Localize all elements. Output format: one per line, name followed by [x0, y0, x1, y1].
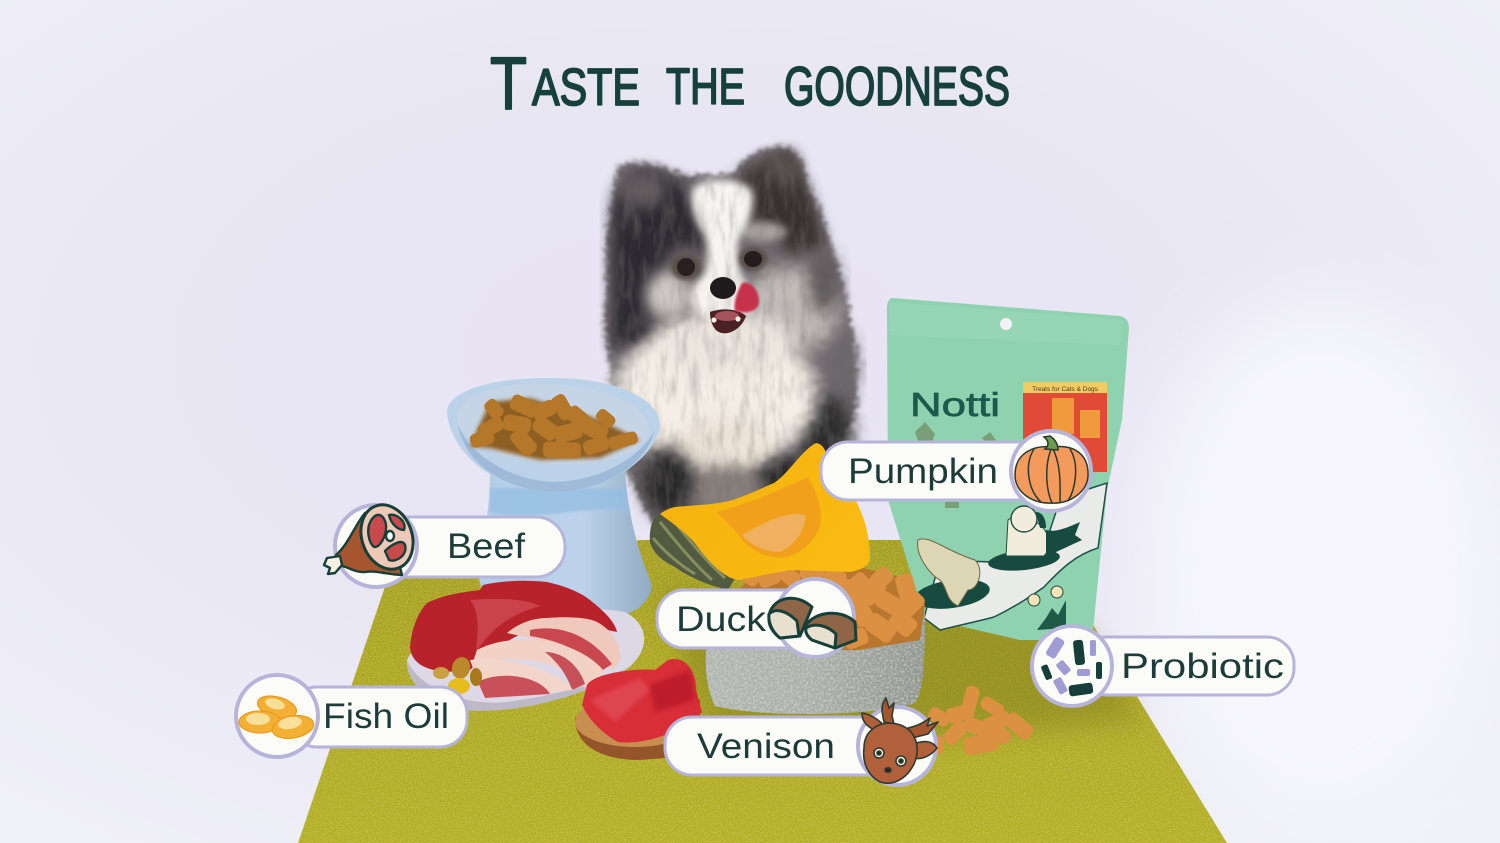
pork slices — [507, 617, 620, 670]
right dark head patch — [738, 150, 825, 255]
pumpkin wedge — [650, 443, 870, 590]
icon circle — [858, 707, 936, 785]
icon: bacteria — [1041, 636, 1102, 697]
label text: Fish Oil — [323, 697, 449, 736]
label text: Probiotic — [1121, 647, 1284, 686]
bowl body — [706, 612, 925, 714]
pill — [821, 442, 1051, 500]
lower chest brown-gray — [683, 466, 767, 510]
muzzle — [690, 274, 750, 322]
white blaze — [692, 180, 753, 290]
pill — [290, 687, 467, 747]
bowl outer — [447, 378, 660, 492]
icon circle — [1032, 626, 1112, 706]
lower left dark fur — [644, 448, 692, 516]
label: Fish Oil — [236, 675, 467, 757]
scattered kibble on table — [926, 685, 1036, 756]
bag illustration: grass — [1037, 600, 1066, 630]
right ear highlight — [766, 154, 798, 182]
white chest — [613, 323, 817, 467]
lower right dark fur — [800, 393, 852, 477]
title — [490, 42, 1010, 125]
kibble in blue bowl — [469, 392, 640, 460]
beef cut — [410, 581, 617, 672]
label: Pumpkin — [821, 431, 1091, 511]
bag small prints — [915, 422, 996, 508]
wood board — [575, 700, 700, 760]
dog — [604, 146, 858, 525]
title: ASTE — [532, 59, 640, 117]
venison on wooden board — [575, 659, 702, 760]
teeth — [711, 316, 741, 323]
bowl inner — [454, 377, 652, 471]
bag illustration: cat on skateboard — [987, 506, 1082, 574]
left cheek fur — [646, 273, 690, 317]
blue bowl stand — [447, 377, 660, 616]
nose — [710, 277, 736, 299]
label: Beef — [324, 497, 565, 587]
product window — [1023, 382, 1107, 472]
pill — [657, 590, 817, 648]
dog fur tones — [612, 150, 857, 516]
icon: deer head — [862, 698, 938, 783]
label: Venison — [665, 698, 938, 785]
pumpkin skin — [650, 507, 740, 590]
pill — [1080, 637, 1294, 695]
plate — [407, 609, 644, 709]
icon circle — [335, 505, 417, 587]
right cheek fur — [740, 268, 840, 352]
left ear — [618, 172, 666, 208]
icon: pumpkin — [1015, 436, 1088, 503]
icon circle — [776, 579, 854, 657]
icon circle — [236, 675, 318, 757]
small capsules on plate — [433, 655, 482, 694]
icon: ham leg — [324, 497, 422, 577]
title: THE — [666, 58, 745, 115]
table with yellow-green cloth — [298, 540, 1227, 843]
label text: Pumpkin — [848, 452, 998, 491]
label: Probiotic — [1032, 626, 1294, 706]
brand name: Notti — [910, 386, 1000, 423]
tongue — [734, 283, 759, 312]
bag illustration: dog on skateboard — [912, 539, 992, 613]
stand base — [478, 470, 652, 616]
icon circle — [1011, 431, 1091, 511]
plate of raw meat — [407, 581, 644, 711]
label text: Venison — [697, 727, 835, 766]
pumpkin seed cavity — [716, 477, 821, 558]
pill — [370, 517, 565, 577]
title: GOODNESS — [784, 55, 1010, 117]
brow streak — [743, 223, 787, 241]
pumpkin flesh — [660, 443, 870, 580]
dog fur silhouette — [604, 146, 858, 525]
red meat chunks — [582, 659, 702, 743]
kibble pile — [735, 562, 927, 651]
pill — [665, 717, 897, 775]
icon: capsules — [239, 692, 316, 741]
icon: duck slices — [769, 598, 856, 648]
label text: Duck — [676, 600, 767, 639]
gray bowl with kibble — [706, 562, 927, 714]
mouth — [710, 309, 746, 333]
bag illustration: flowers — [1028, 586, 1063, 606]
eyes — [671, 247, 767, 280]
product window: Treats for Cats & Dogs — [1032, 386, 1099, 393]
title: T — [490, 42, 527, 125]
bag body — [887, 298, 1129, 640]
pet food bag — [887, 298, 1129, 640]
label text: Beef — [447, 527, 525, 566]
hang hole — [1000, 318, 1012, 330]
bag illustration: road — [924, 483, 1107, 630]
left dark head patch — [612, 168, 708, 350]
label: Duck — [657, 579, 856, 657]
